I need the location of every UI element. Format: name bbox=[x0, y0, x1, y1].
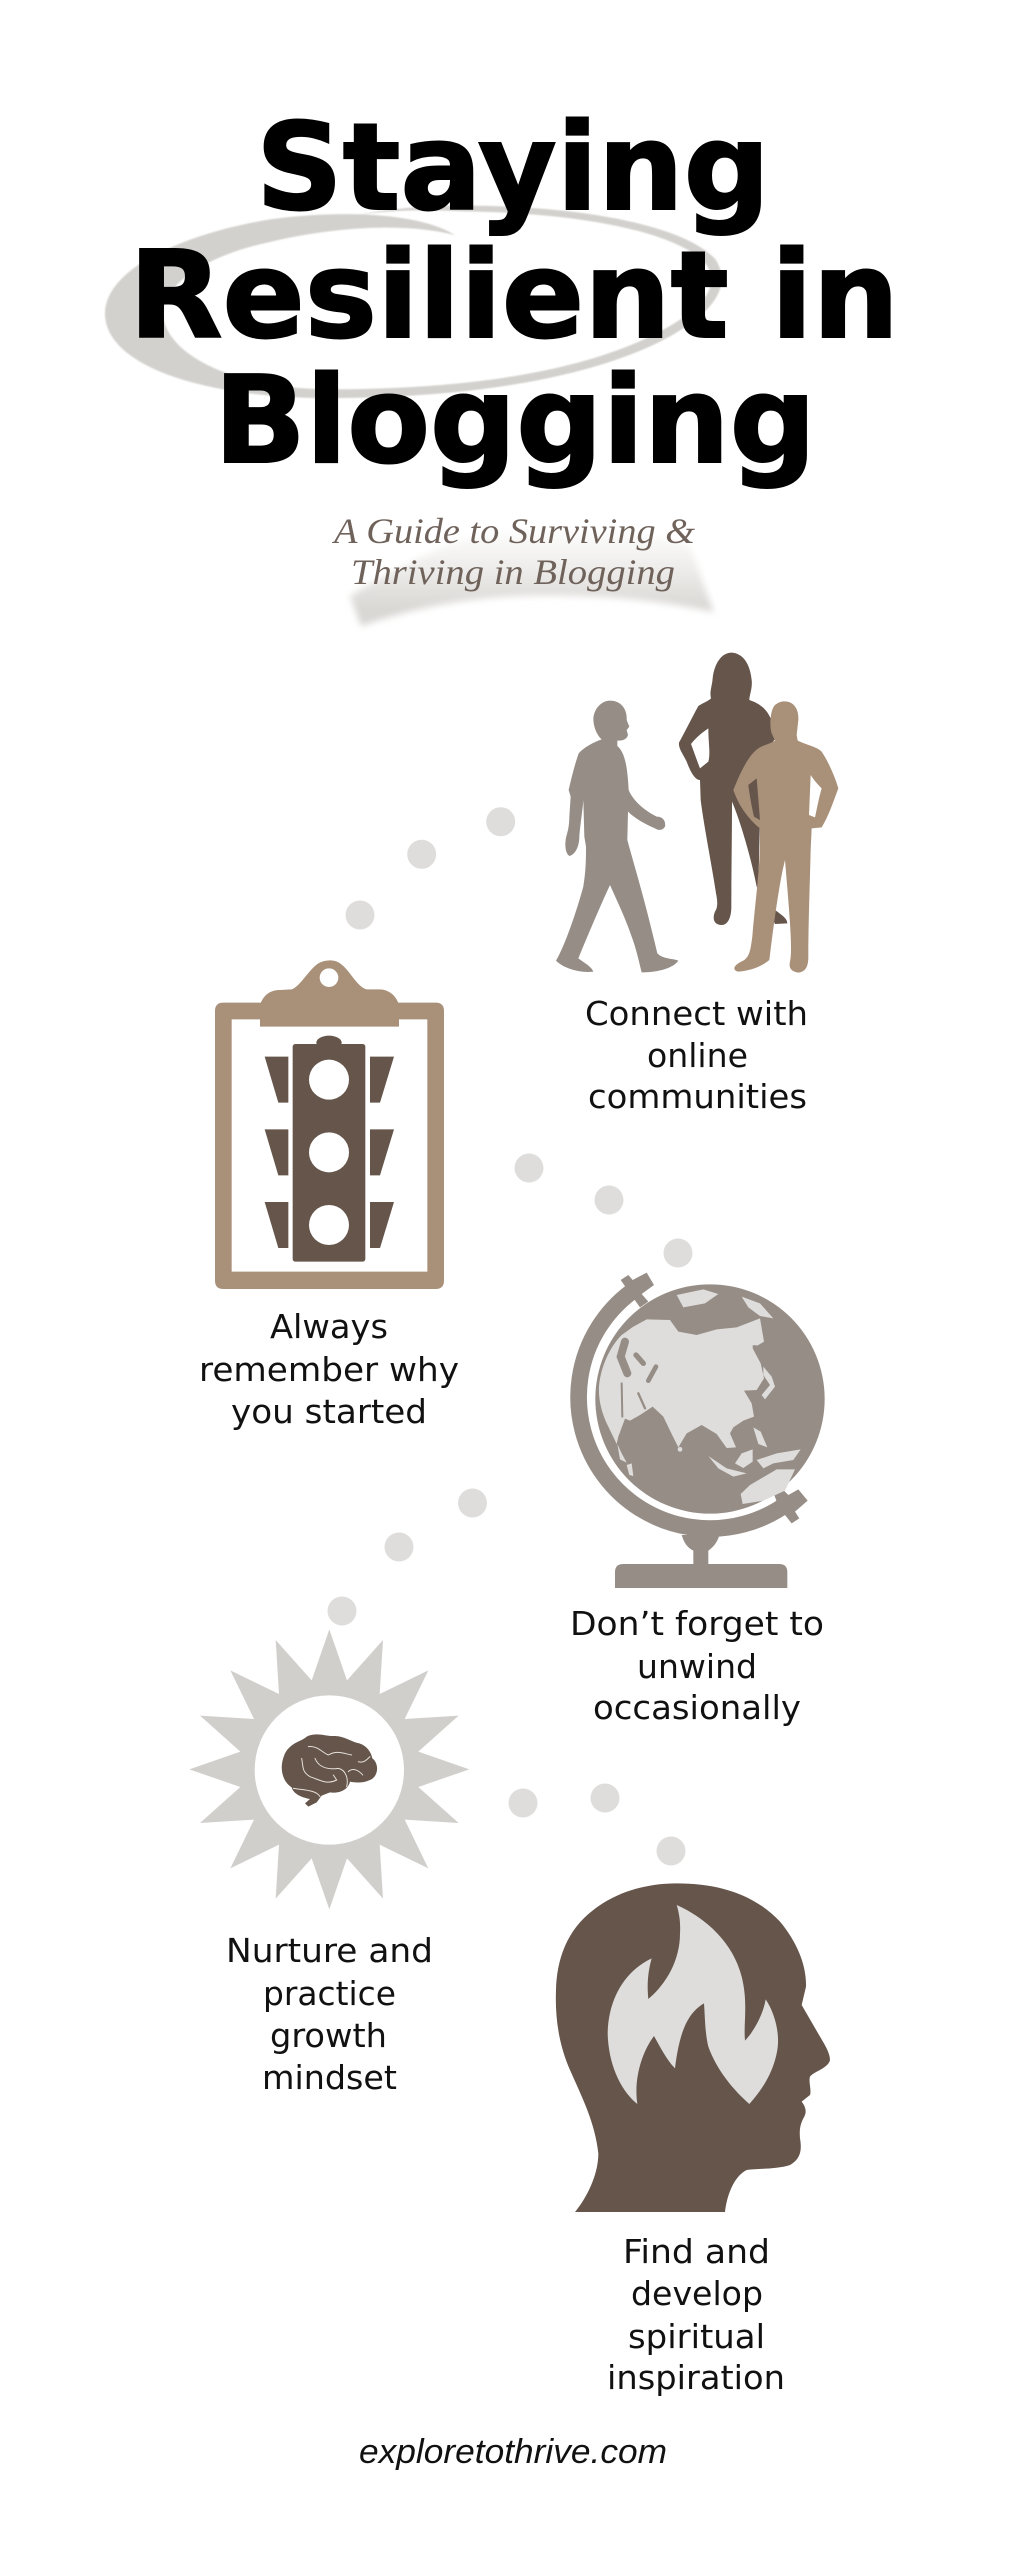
label: find and develop spiritual inspiration bbox=[607, 2232, 785, 2397]
label: always remember why you started bbox=[199, 1307, 459, 1431]
label: connect with online communities: communities bbox=[588, 1077, 807, 1116]
label: find and develop spiritual inspiration: develop bbox=[631, 2274, 763, 2313]
icon: head with flame bbox=[556, 1883, 830, 2212]
label: find and develop spiritual inspiration: spiritual bbox=[628, 2317, 765, 2356]
globe sphere bbox=[595, 1284, 825, 1514]
icon: three people silhouettes bbox=[556, 653, 838, 973]
label: always remember why you started: remember why bbox=[199, 1350, 459, 1389]
dots: path from sun to head bbox=[508, 1784, 686, 1866]
continents bbox=[599, 1289, 801, 1504]
label: nurture and practice growth mindset: Nurture and bbox=[226, 1931, 433, 1970]
title bbox=[129, 99, 899, 491]
label: connect with online communities: online bbox=[647, 1036, 748, 1075]
title: Blogging bbox=[214, 352, 816, 491]
label: don't forget to unwind occasionally: unwind bbox=[637, 1647, 757, 1686]
subtitle: A Guide to Surviving & bbox=[332, 511, 695, 551]
traffic light bbox=[265, 1036, 394, 1262]
label: nurture and practice growth mindset: practice bbox=[263, 1974, 396, 2013]
clipboard clip bbox=[260, 960, 399, 1027]
icon: sun with brain bbox=[189, 1629, 469, 1909]
silhouette: walking man bbox=[556, 701, 678, 972]
brain bbox=[282, 1734, 377, 1807]
label: nurture and practice growth mindset: mindset bbox=[262, 2058, 397, 2097]
label: don't forget to unwind occasionally: occasionally bbox=[593, 1688, 801, 1727]
decorative swoosh behind subtitle bbox=[350, 528, 714, 626]
silhouette: woman bbox=[679, 653, 787, 925]
dots: path from clipboard to globe bbox=[514, 1154, 692, 1268]
label: don't forget to unwind occasionally: Don’t forget to bbox=[570, 1604, 824, 1643]
label: find and develop spiritual inspiration: inspiration bbox=[607, 2358, 785, 2397]
label: always remember why you started: you started bbox=[231, 1392, 427, 1431]
subtitle bbox=[332, 511, 695, 592]
label: find and develop spiritual inspiration: Find and bbox=[623, 2232, 770, 2271]
label: connect with online communities: Connect with bbox=[585, 994, 808, 1033]
label: always remember why you started: Always bbox=[270, 1307, 388, 1346]
sunburst bbox=[189, 1629, 469, 1909]
title: Staying bbox=[256, 99, 770, 238]
footer: website: exploretothrive.com bbox=[359, 2433, 667, 2471]
globe stand bbox=[579, 1273, 808, 1588]
flame bbox=[608, 1905, 778, 2104]
silhouette: standing man bbox=[733, 701, 838, 973]
decorative swirl behind title bbox=[105, 206, 722, 398]
label: nurture and practice growth mindset bbox=[226, 1931, 433, 2097]
title: Resilient in bbox=[129, 227, 899, 366]
icon: clipboard with traffic light bbox=[215, 960, 444, 1289]
head silhouette bbox=[556, 1883, 830, 2212]
clipboard frame bbox=[215, 1003, 444, 1289]
dots: path from people to clipboard bbox=[346, 807, 515, 930]
icon: globe bbox=[579, 1273, 825, 1588]
inland seas bbox=[621, 1342, 768, 1417]
label: connect with online communities bbox=[585, 994, 808, 1116]
label: nurture and practice growth mindset: growth bbox=[270, 2016, 387, 2055]
dots: path from globe to sun bbox=[328, 1488, 487, 1626]
subtitle: Thriving in Blogging bbox=[351, 552, 675, 592]
label: don't forget to unwind occasionally bbox=[570, 1604, 824, 1727]
